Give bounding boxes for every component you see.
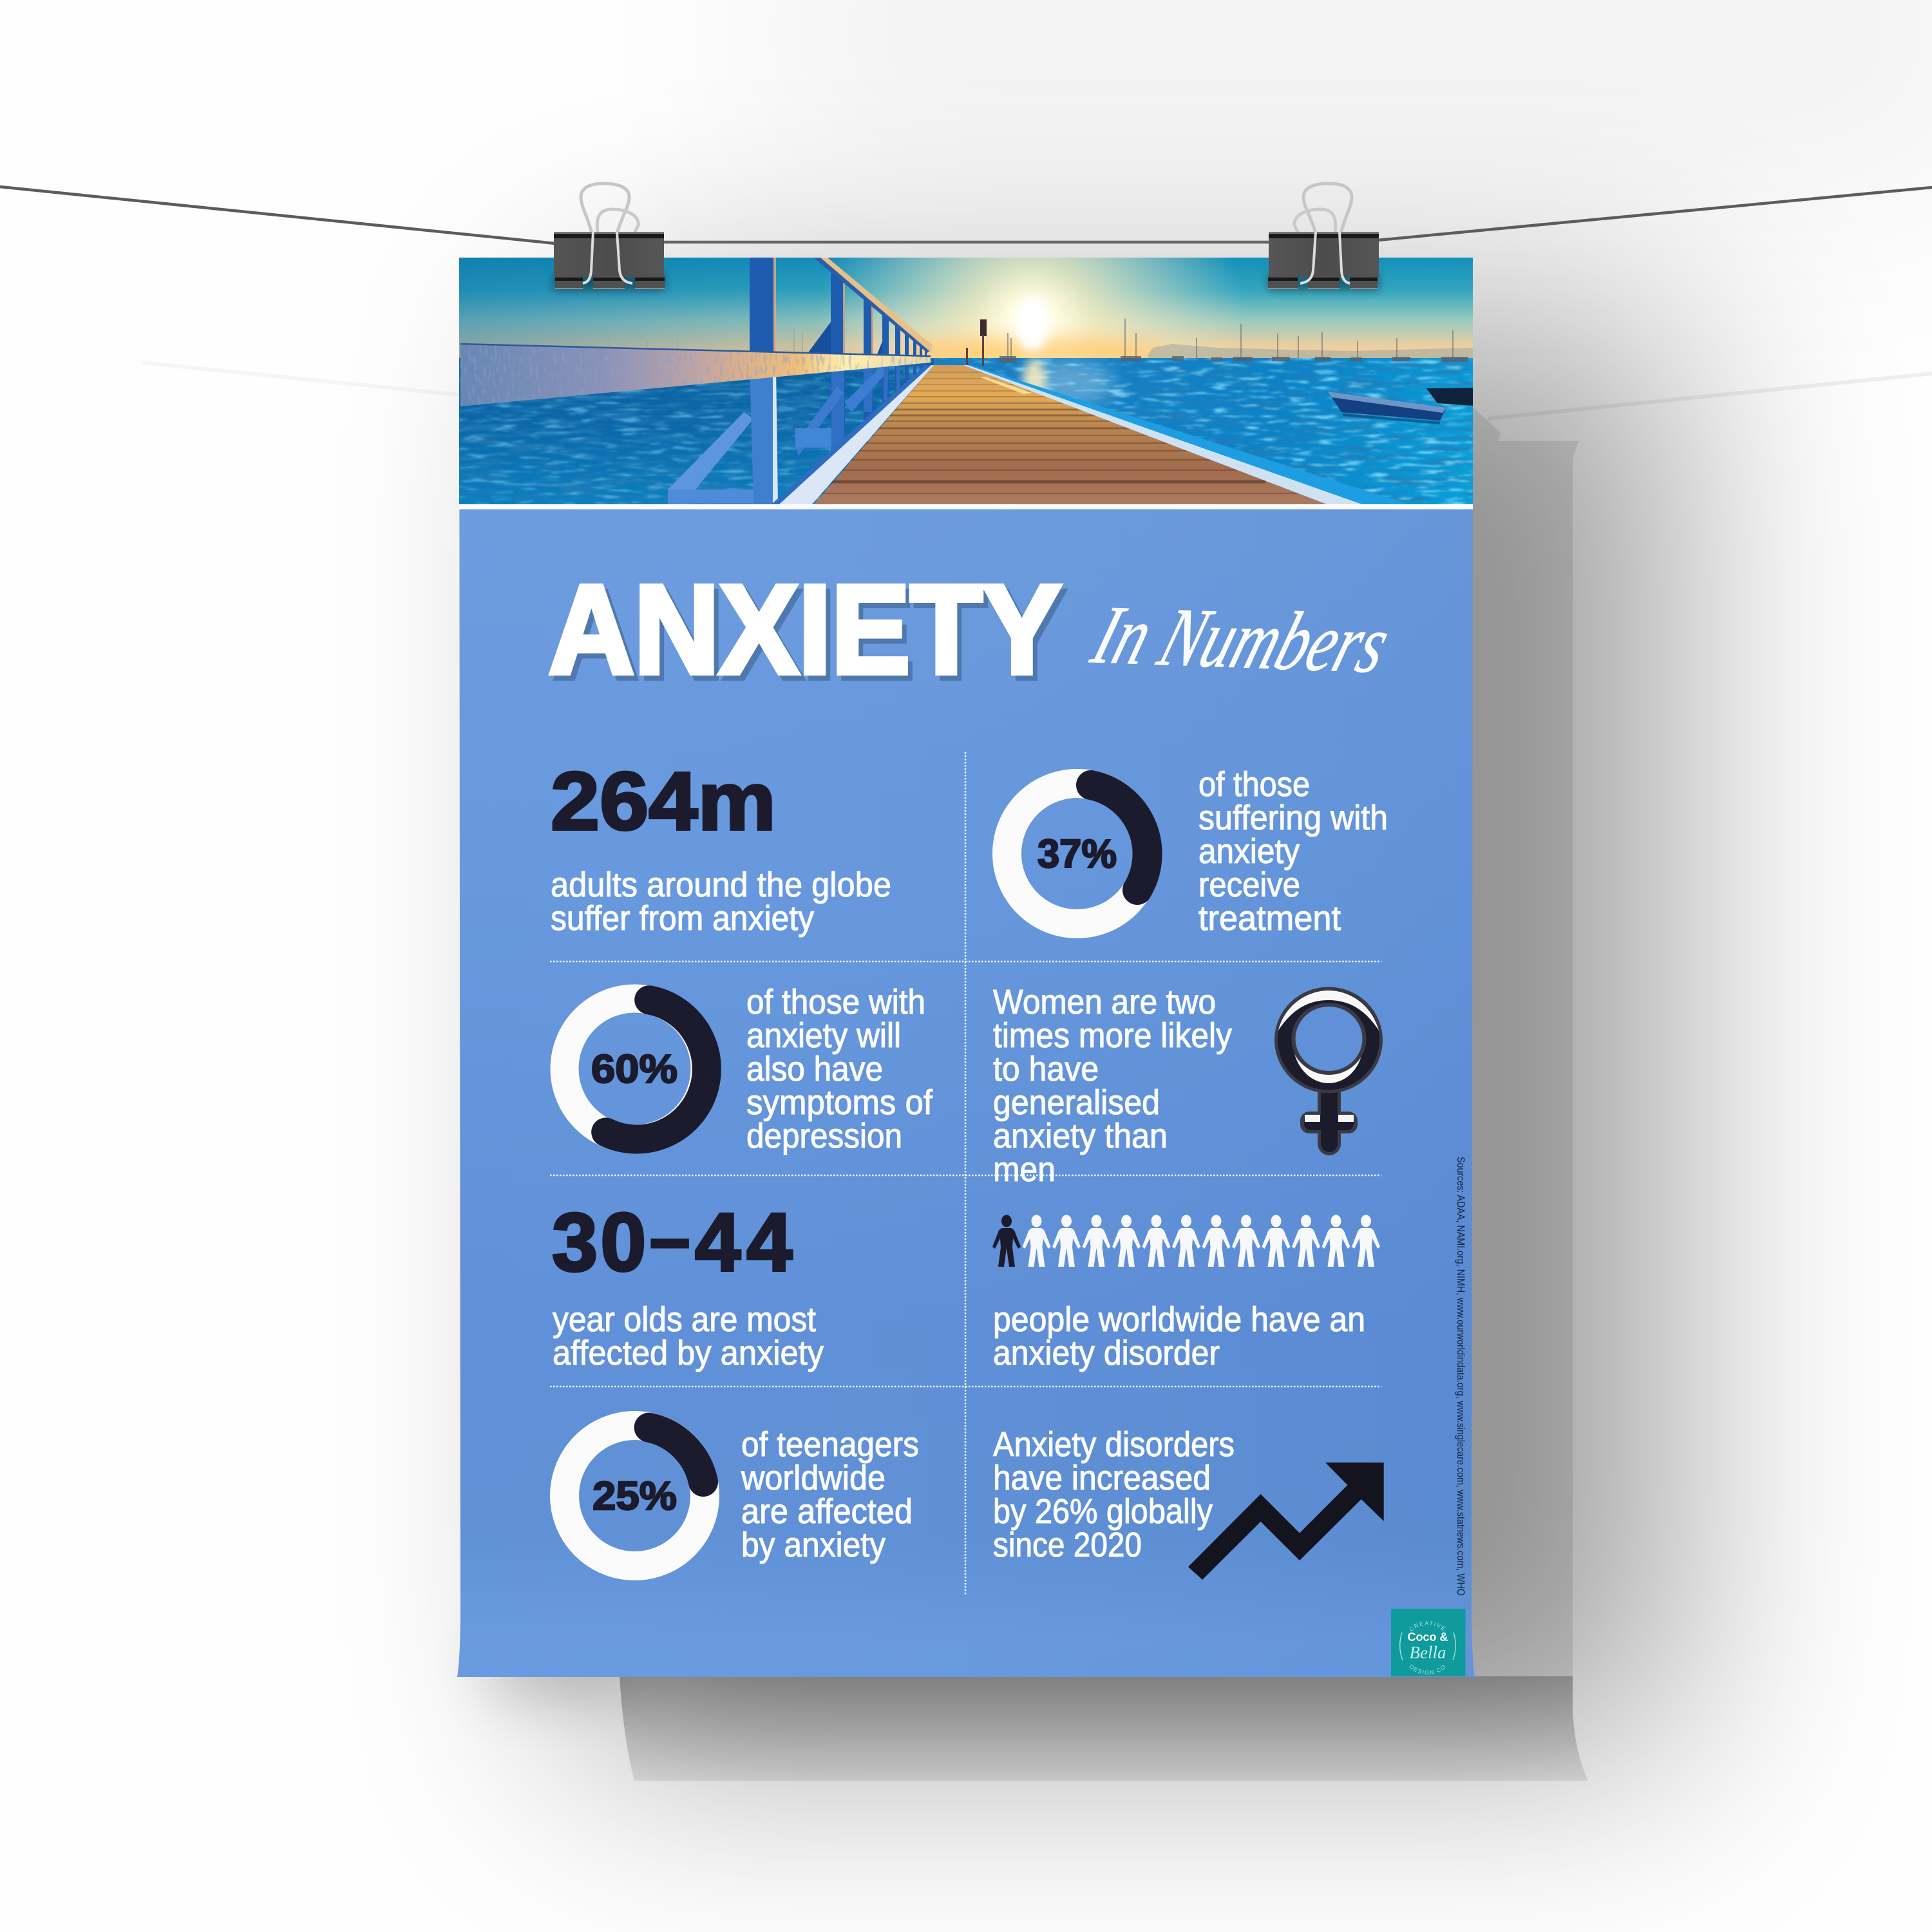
title: ANXIETY: ANXIETY [549,559,1061,700]
grid dividers [550,752,1381,1596]
big side rail [460,344,931,406]
stat: 60% donut: 60% [591,1047,677,1092]
stat: 30–44: 30 [552,1197,649,1289]
stat: 264m [551,755,891,938]
deck right edge [963,365,1408,504]
hanging string [0,187,1932,243]
photo: pier at sunset [459,258,1473,504]
pier deck [814,365,1327,504]
title: ANXIETY: ANXIETY [553,564,1066,705]
moored sailboats [523,319,1453,358]
hard curled-paper shadow [620,406,1588,1781]
subtitle: In Numbers: In Numbers [1082,589,1401,690]
stat: 30–44: – [650,1198,690,1278]
poster side tone [457,509,1475,1677]
logo: Coco & Bella: Bella [1410,1643,1446,1662]
stat: 30–44: affected by anxiety [553,1334,824,1372]
sailboat hulls [999,356,1468,363]
stat: 30–44 [552,1197,824,1372]
distant hill [1148,344,1473,358]
text: women are two times more likely: Women are two [993,983,1216,1021]
dark boat at right [1426,388,1473,406]
text: anxiety disorders increased: Anxiety disorders [993,1425,1235,1464]
text: women are two times more likely: to have [993,1050,1099,1088]
text: people worldwide: anxiety disorder [993,1334,1220,1372]
deck left edge [779,365,934,504]
binder clip right [1268,184,1379,290]
stat: 60% donut [564,998,706,1139]
text: women are two times more likely: men [993,1150,1056,1189]
logo background [1391,1609,1466,1676]
icon: female symbol [1274,987,1383,1155]
text: 37% description: suffering with [1198,799,1388,837]
text: women are two times more likely [993,983,1232,1189]
text: women are two times more likely: anxiety than [993,1117,1168,1155]
text: 60% description: depression [746,1117,902,1155]
rail texture [459,341,933,409]
text: 25% description: by anxiety [741,1526,886,1564]
text: 37% description: receive [1198,866,1300,904]
far-side pier posts [750,258,927,451]
sign post [966,319,987,366]
post highlights [773,258,873,354]
lower railing and braces [668,357,900,504]
logo: Coco & Bella: Coco & [1408,1631,1448,1643]
poster paper [457,258,1475,1677]
shadow under poster [620,1676,1588,1781]
text: 37% description [1198,765,1388,938]
text: 25% description: of teenagers [741,1425,919,1464]
logo: Coco & Bella: CREATIVE [1409,1621,1446,1631]
dark person [992,1215,1021,1267]
shadow under poster left [489,1636,625,1694]
stat: 264m: adults around the globe [551,866,891,904]
text: 37% description: of those [1198,765,1310,804]
text: 60% description: of those with [746,983,925,1021]
text: women are two times more likely: generalised [993,1083,1160,1122]
text: people worldwide: people worldwide have an [993,1300,1365,1339]
text: anxiety disorders increased: by 26% globally [993,1492,1213,1531]
text: 60% description [746,983,933,1155]
text: 25% description [741,1425,919,1564]
logo: Coco & Bella [1391,1609,1466,1676]
icon row: one in thirteen people [992,1215,1380,1267]
text: 37% description: anxiety [1198,832,1300,871]
text: 60% description: also have [746,1050,883,1088]
stat: 25% donut: 25% [592,1474,677,1519]
top handrail [813,258,933,353]
icon: rising arrow [1188,1463,1384,1580]
water [459,358,1473,504]
logo: Coco & Bella: DESIGN CO [1409,1664,1445,1674]
stat: 264m: 264m [551,755,776,848]
white people [1023,1215,1380,1267]
text: 25% description: are affected [741,1492,913,1531]
string shadow left [142,363,459,395]
stat: 25% donut [564,1426,705,1566]
soft wall shadow [580,322,1674,1752]
stat: 264m: suffer from anxiety [551,899,814,938]
string shadow right [1488,374,1932,419]
top wall tint [773,0,1932,193]
text: anxiety disorders increased: have increased [993,1459,1211,1497]
white photo border [459,504,1473,509]
binder clip left [554,184,665,290]
deck left edge shadow [772,365,931,504]
rail shadow line [460,344,931,356]
sky [459,258,1473,358]
text: anxiety disorders increased [993,1425,1235,1564]
sources vertical text: Sources: ADAA, NAMI.org, NIMH, www.ourworldindata.org, www.singlecare.com, www.statnews.com, WHO [1455,1157,1467,1596]
text: 25% description: worldwide [741,1459,886,1497]
stat: 30–44: year olds are most [553,1300,816,1339]
stat: 37% donut: 37% [1037,832,1117,876]
moored rowing boat [1328,392,1446,423]
text: 37% description: treatment [1198,899,1341,938]
text: 60% description: anxiety will [746,1016,901,1055]
text: women are two times more likely: times more likely [993,1016,1232,1055]
poster [457,258,1475,1677]
text: people worldwide [993,1300,1365,1372]
stat: 37% donut [1007,783,1148,923]
text: anxiety disorders increased: since 2020 [993,1526,1142,1564]
text: 60% description: symptoms of [746,1083,933,1122]
stat: 30–44: 44 [695,1197,798,1289]
